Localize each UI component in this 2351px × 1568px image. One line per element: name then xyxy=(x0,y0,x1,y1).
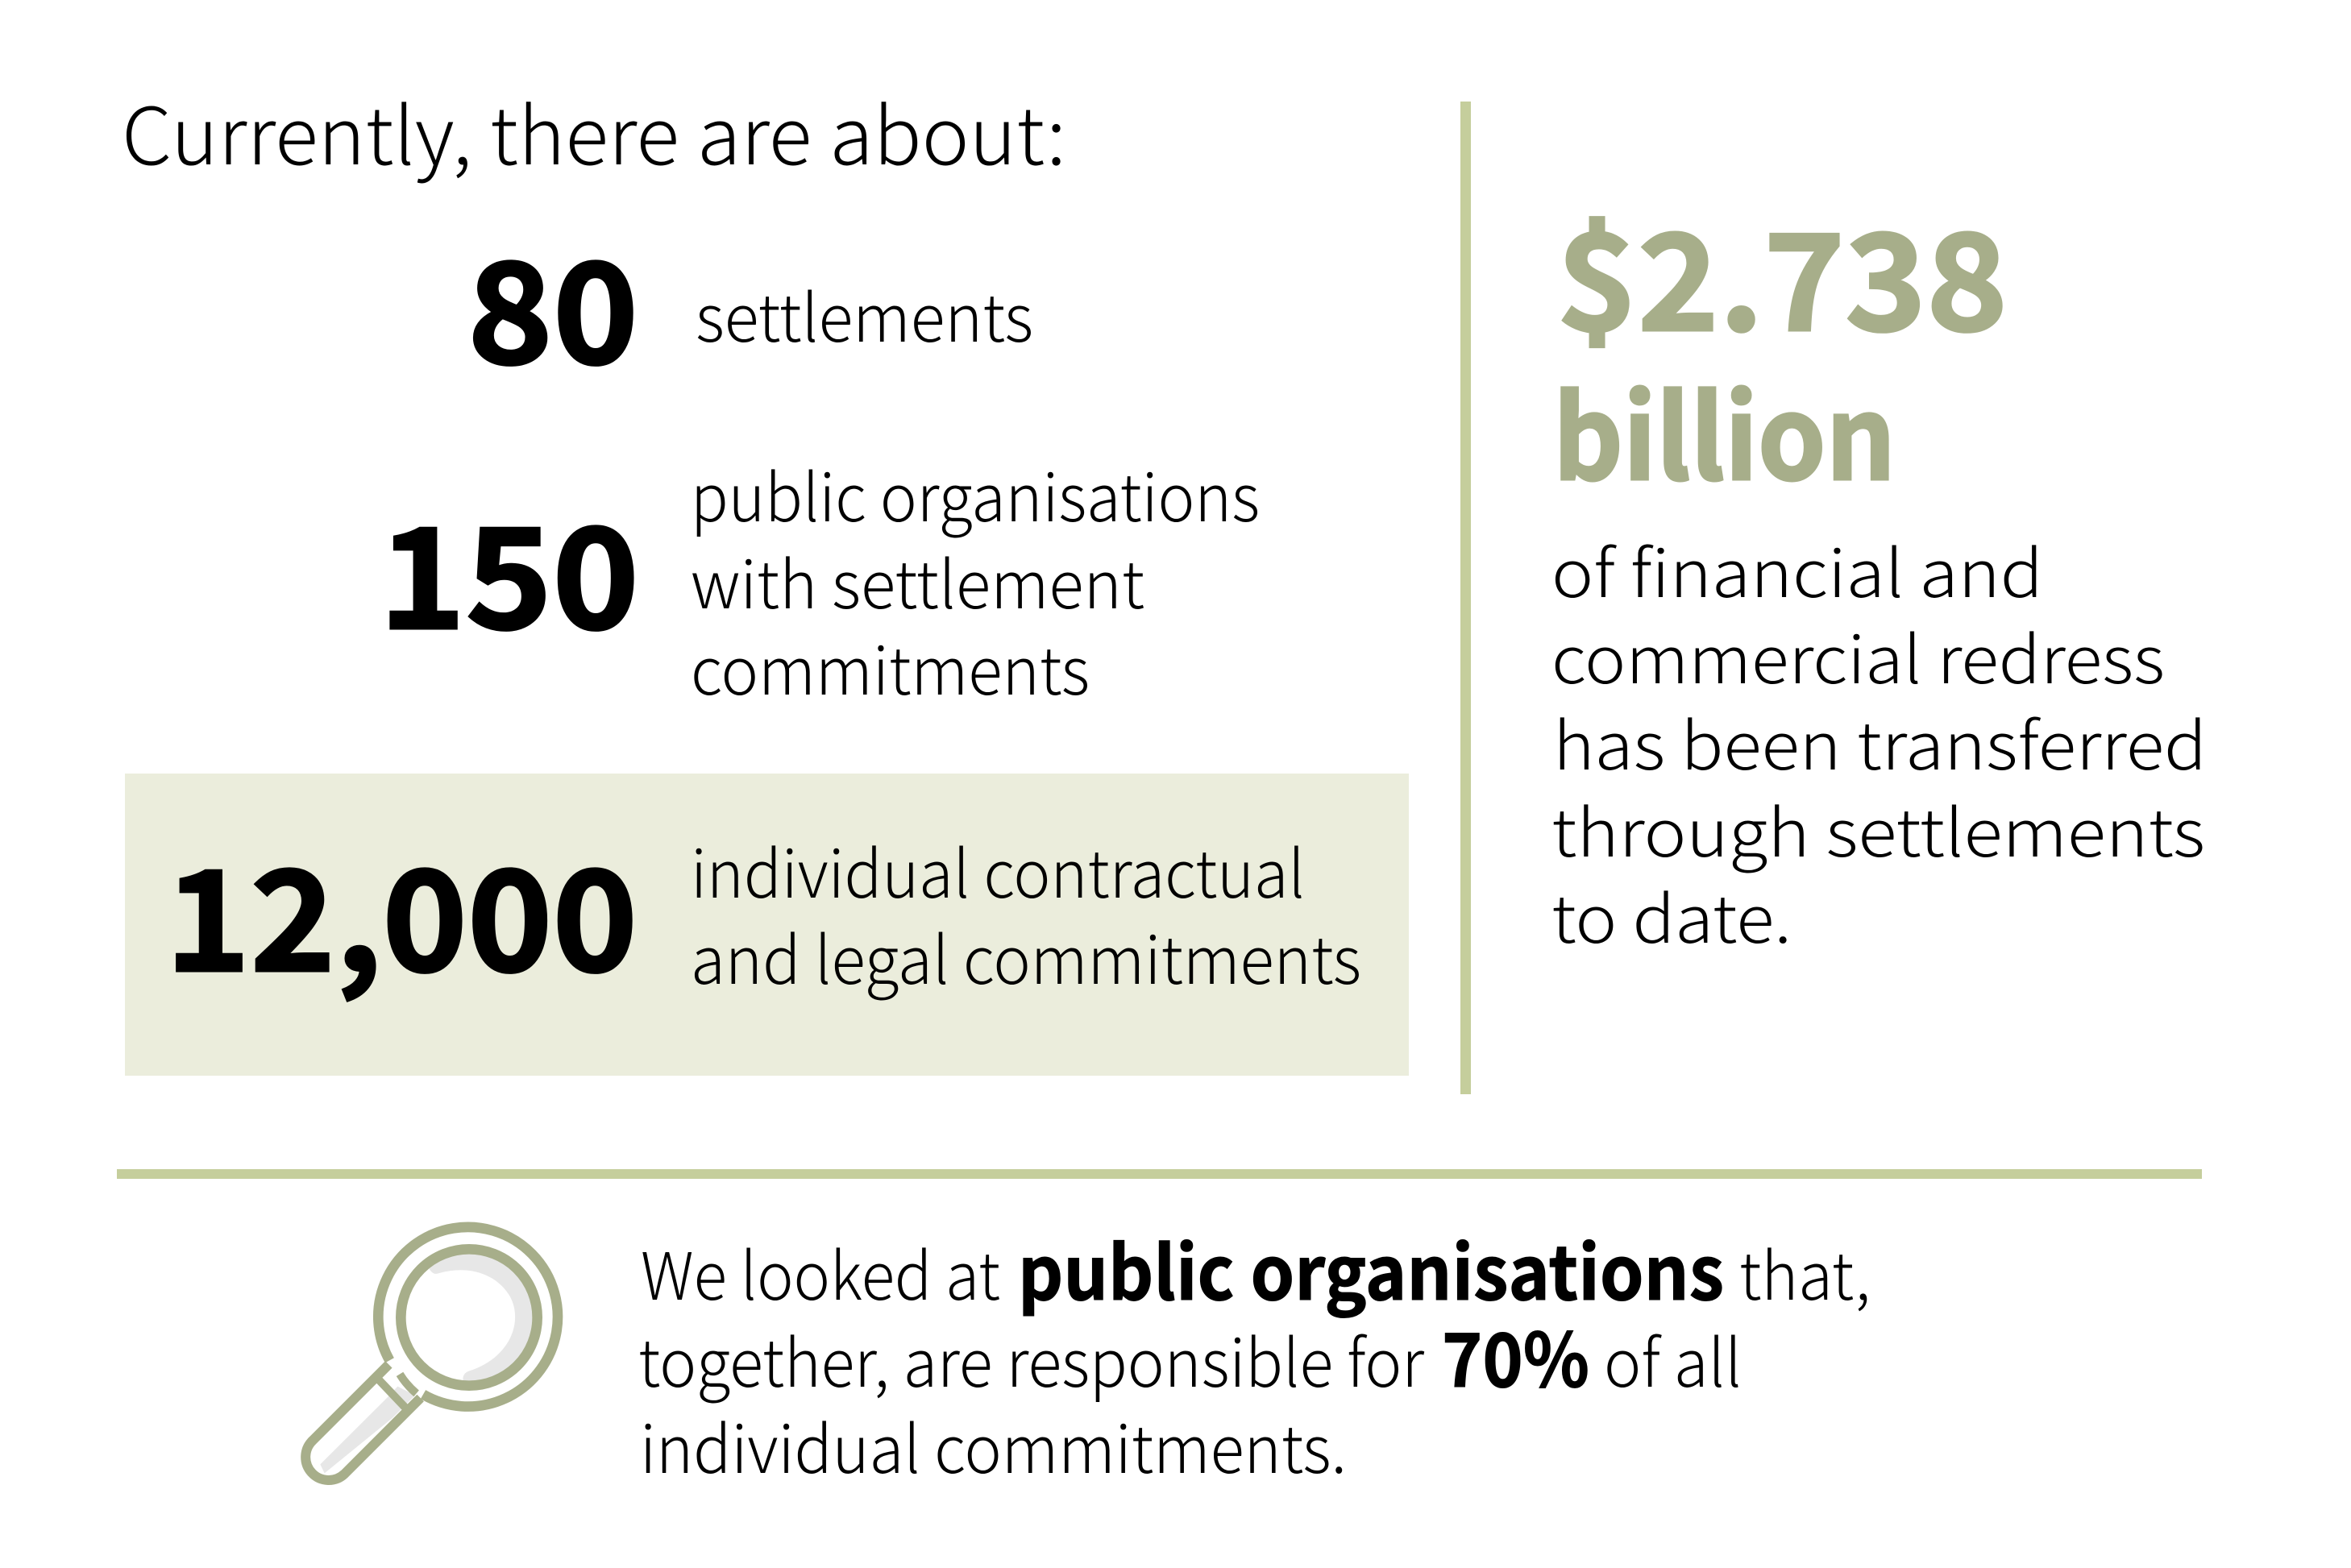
number: 150: 150 xyxy=(379,467,639,669)
label: individual contractual and legal commitments xyxy=(691,823,1361,1003)
text: scope statement: individual commitments. xyxy=(640,1398,1347,1492)
panel: financial redress xyxy=(1551,175,2207,962)
text: scope statement: that, xyxy=(1739,1225,1871,1319)
figure: billion: billion xyxy=(1553,346,1896,513)
label: individual contractual and legal commitments: individual contractual xyxy=(691,823,1305,917)
text: redress description: of financial and xyxy=(1551,522,2043,616)
text: scope statement: together, are responsible for xyxy=(638,1312,1425,1406)
text: redress description: through settlements xyxy=(1551,782,2205,876)
label: public organisations with settlement commitments: commitments xyxy=(691,620,1090,714)
text: redress description: has been transferred xyxy=(1553,695,2207,789)
stat: 80 settlements xyxy=(467,201,1033,404)
panel: highlighted 12,000 commitments xyxy=(125,774,1409,1076)
label: public organisations with settlement commitments xyxy=(691,446,1260,714)
highlight box xyxy=(125,774,1409,1076)
number: 12,000: 12,000 xyxy=(165,809,638,1011)
label: individual contractual and legal commitments: and legal commitments xyxy=(691,909,1361,1003)
text: scope statement: of all xyxy=(1604,1312,1742,1406)
icon: magnifying glass xyxy=(305,1227,558,1480)
figure: $2.738: $2.738 xyxy=(1556,175,2008,369)
text: redress description xyxy=(1551,522,2207,962)
title: Currently, there are about: xyxy=(122,73,1066,188)
label: settlements: settlements xyxy=(696,267,1033,361)
number: 80: 80 xyxy=(467,201,638,404)
stat: 150 public organisations xyxy=(379,446,1260,714)
text: scope statement: 70% xyxy=(1442,1301,1589,1408)
text: redress description: commercial redress xyxy=(1551,608,2165,703)
text: scope statement: public organisations xyxy=(1018,1214,1724,1321)
label: public organisations with settlement commitments: with settlement xyxy=(691,533,1144,628)
text: redress description: to date. xyxy=(1551,868,1792,962)
text: scope statement: We looked at xyxy=(641,1225,1000,1319)
label: public organisations with settlement commitments: public organisations xyxy=(691,446,1260,541)
text: scope statement xyxy=(638,1214,1871,1492)
